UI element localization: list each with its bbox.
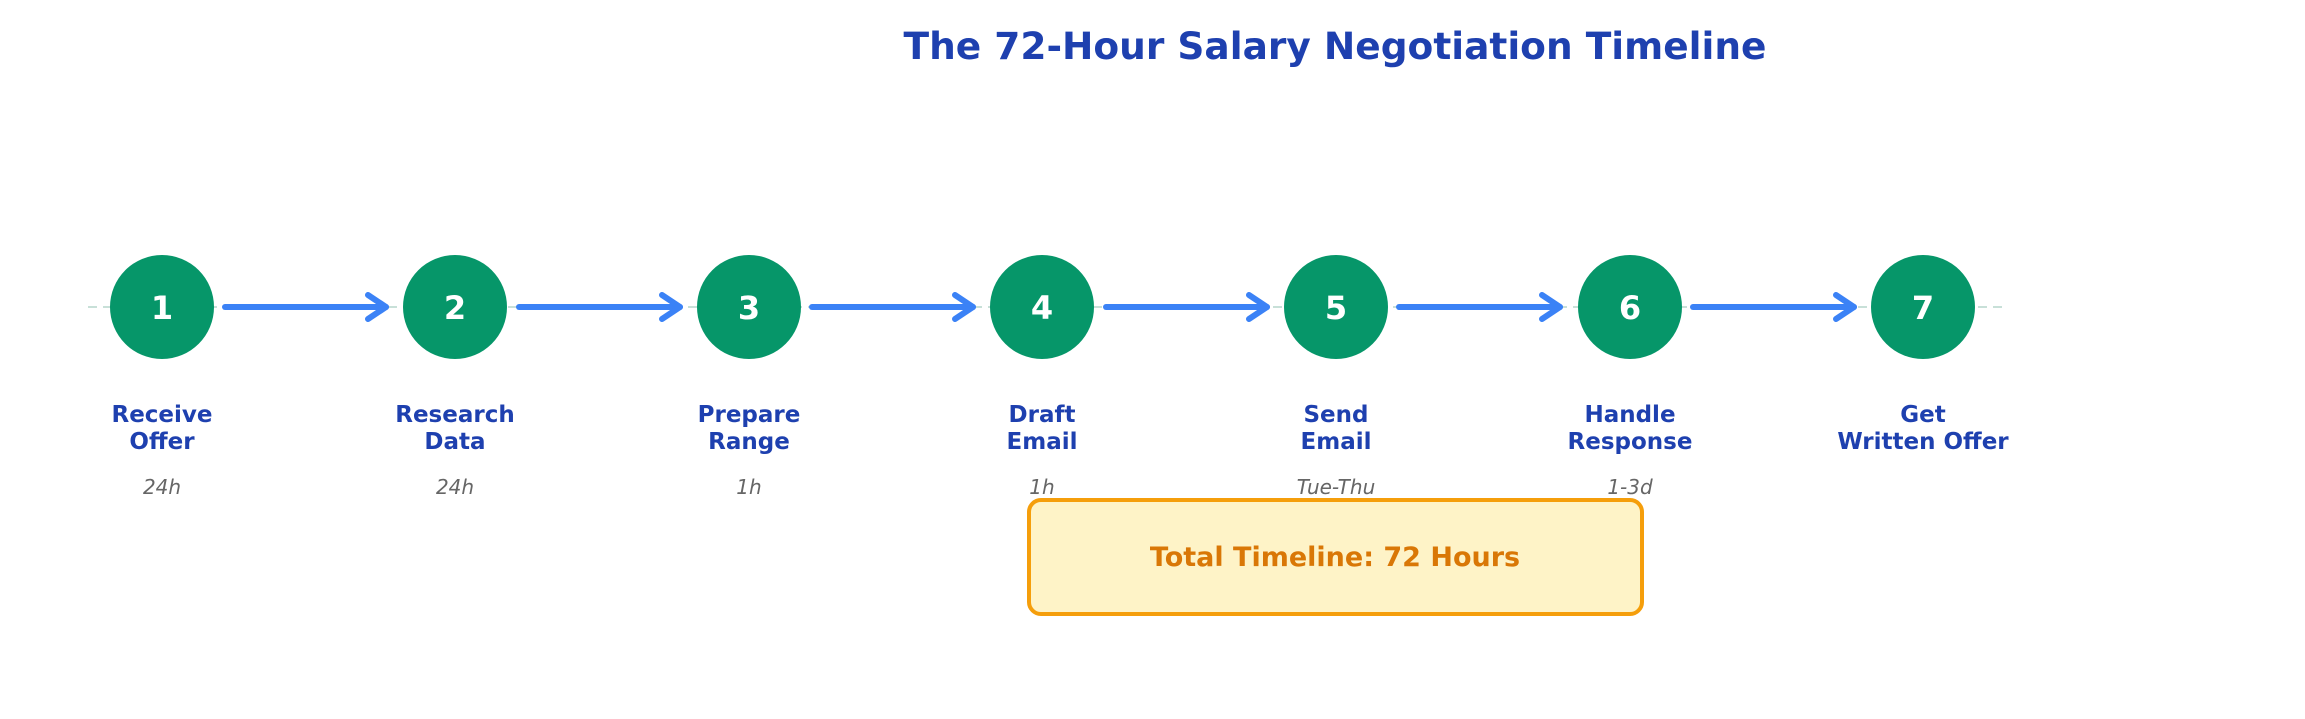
- step 2: Research: [395, 402, 515, 428]
- arrow 2-3: [519, 295, 680, 319]
- step 2: 24h: [436, 475, 474, 499]
- step 4: [990, 255, 1094, 499]
- step 7: Written Offer: [1837, 429, 2009, 455]
- step 5: [1284, 255, 1388, 499]
- step 6: 6: [1619, 289, 1641, 327]
- step 5: Tue-Thu: [1297, 475, 1375, 499]
- step 2: 2: [444, 289, 466, 327]
- arrow 4-5: [1106, 295, 1267, 319]
- step 4: 1h: [1029, 475, 1055, 499]
- step 6: 1-3d: [1607, 475, 1653, 499]
- step 6: [1568, 255, 1692, 499]
- arrow 6-7: [1693, 295, 1854, 319]
- step 3: Range: [708, 429, 790, 455]
- step 3: 3: [738, 289, 760, 327]
- step 6: Response: [1568, 429, 1692, 455]
- step 3: Prepare: [698, 402, 800, 428]
- step 1: 1: [151, 289, 173, 327]
- step 5: 5: [1325, 289, 1347, 327]
- step 7: 7: [1912, 289, 1934, 327]
- step 1: [110, 255, 214, 499]
- step 6: Handle: [1584, 402, 1676, 428]
- callout: total timeline: [1029, 500, 1642, 614]
- step 2: Data: [424, 429, 486, 455]
- arrows: [225, 295, 1854, 319]
- step 5: Email: [1301, 429, 1371, 455]
- step 1: Offer: [129, 429, 195, 455]
- step 4: 4: [1031, 289, 1053, 327]
- step 2: [395, 255, 515, 499]
- step 3: [697, 255, 801, 499]
- step 5: Send: [1303, 402, 1369, 428]
- step 3: 1h: [736, 475, 762, 499]
- arrow 5-6: [1399, 295, 1560, 319]
- step 7: [1837, 255, 2009, 455]
- step 4: Email: [1007, 429, 1077, 455]
- arrow 1-2: [225, 295, 386, 319]
- arrow 3-4: [812, 295, 973, 319]
- step 4: Draft: [1009, 402, 1075, 428]
- step 1: 24h: [143, 475, 181, 499]
- step 1: Receive: [111, 402, 213, 428]
- step 7: Get: [1900, 402, 1946, 428]
- title: The 72-Hour Salary Negotiation Timeline: [904, 24, 1766, 68]
- callout: total timeline: Total Timeline: 72 Hours: [1150, 542, 1520, 573]
